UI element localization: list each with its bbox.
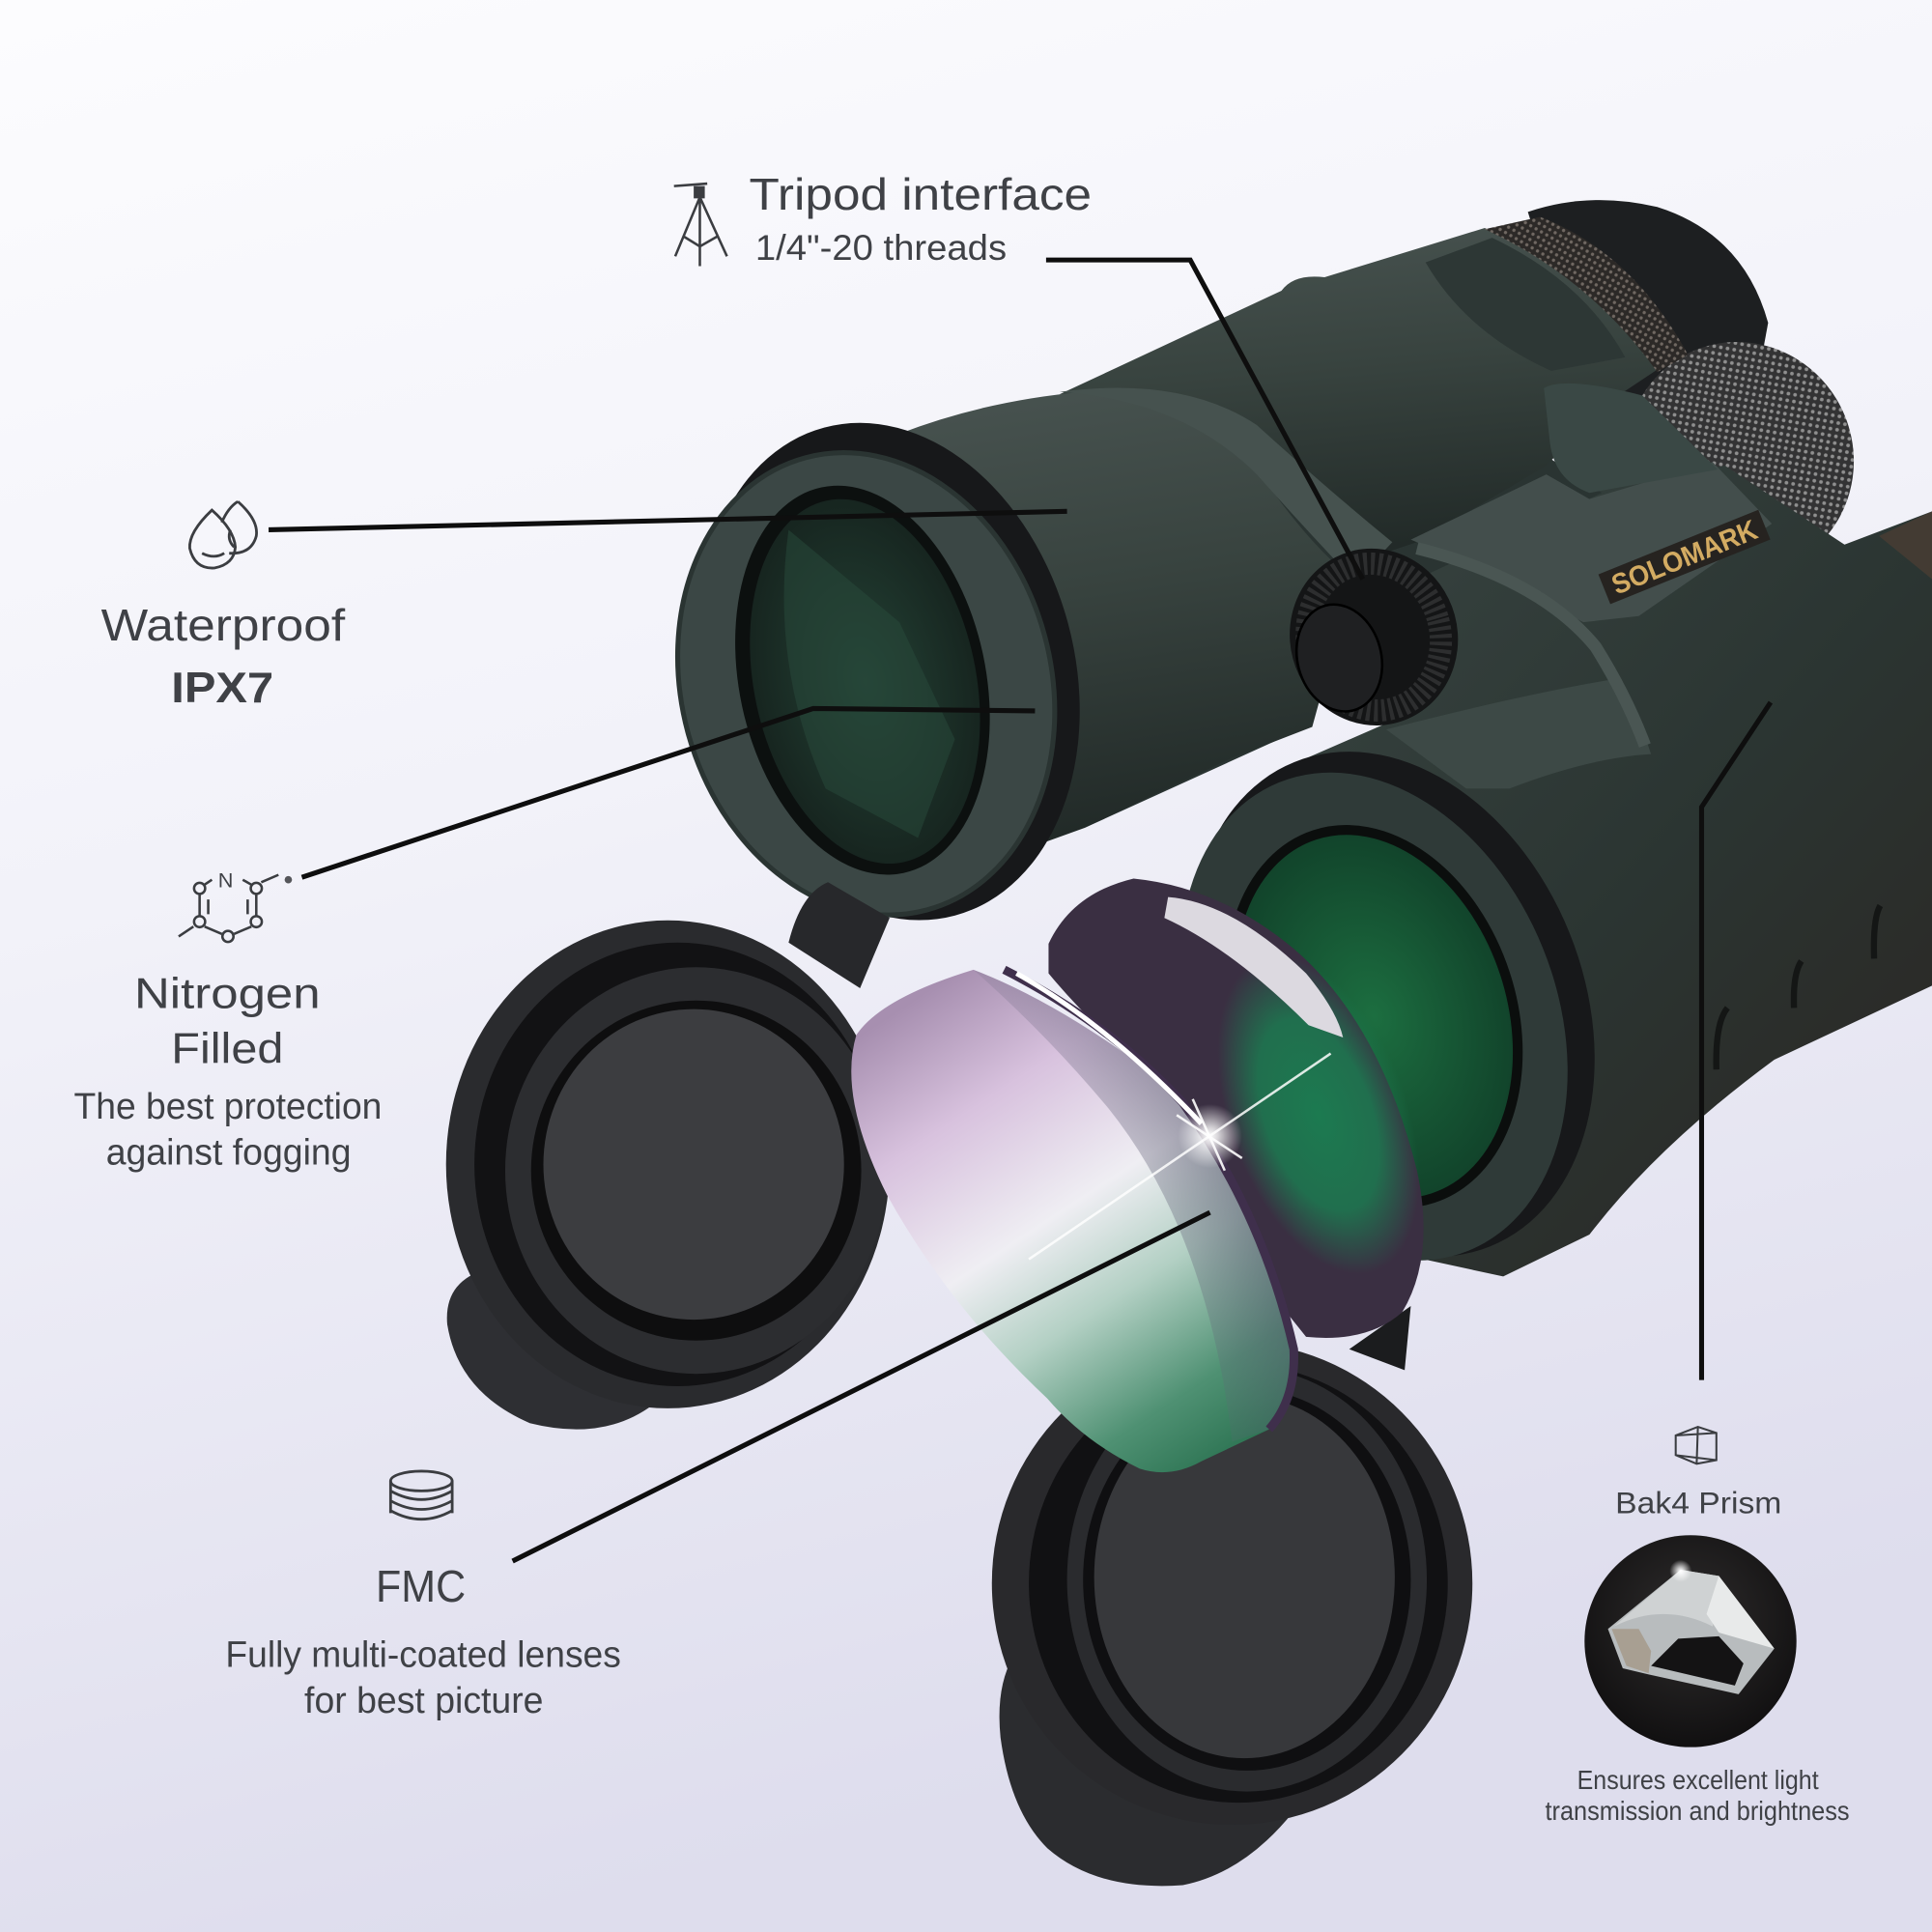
leader: FMC: [513, 1212, 1210, 1561]
icon: water drops: [189, 501, 257, 568]
glass reflection: [784, 529, 955, 838]
eyecup upper: [627, 410, 1105, 958]
focus wheel: [1587, 304, 1892, 612]
prism description: transmission and brightness: [1545, 1796, 1850, 1826]
glass upper: [718, 477, 1011, 885]
FMC description: Fully multi-coated lenses: [225, 1634, 621, 1676]
rear eyepiece: [1528, 200, 1768, 425]
lens white band: [1164, 897, 1343, 1037]
lower barrel: [1213, 466, 1932, 1276]
icon: lens stack: [390, 1471, 452, 1520]
upper barrel rear: [1060, 228, 1658, 567]
purple to green trail: [851, 970, 1292, 1472]
nitrogen description: against fogging: [106, 1131, 352, 1173]
knob: [1270, 529, 1478, 745]
black ring upper: [645, 380, 1133, 963]
nitrogen description: [74, 1086, 382, 1173]
eyecup lower: [1110, 714, 1637, 1319]
FMC description: [225, 1634, 621, 1721]
lens rim: [1005, 970, 1293, 1430]
lens stack: [851, 878, 1459, 1472]
leader: prism: [1701, 702, 1771, 1380]
left lens cap: [446, 882, 890, 1430]
FMC heading: FMC: [376, 1561, 466, 1611]
lower barrel shoulder highlight: [1386, 680, 1651, 788]
barrel underlay: [1060, 394, 1602, 828]
logo plate: SOLOMARK: [1607, 514, 1762, 601]
waterproof heading: Waterproof: [101, 600, 345, 650]
nitrogen description: The best protection: [74, 1086, 382, 1127]
tripod heading: Tripod interface: [750, 169, 1092, 219]
trail shading: [974, 970, 1292, 1441]
glass lower: [1183, 792, 1564, 1240]
wedge: [1544, 384, 1718, 493]
binoculars body: [627, 200, 1932, 1319]
prism image: [1584, 1535, 1797, 1747]
FMC description: for best picture: [304, 1680, 543, 1721]
rear knurled ring: [1485, 216, 1688, 372]
leader: waterproof: [269, 511, 1067, 529]
leader: nitrogen: [301, 708, 1035, 877]
bottom lens cap: [992, 1306, 1472, 1886]
right side brown haze: [1879, 511, 1932, 579]
nitrogen heading: [134, 970, 321, 1073]
rear window patch: [1426, 238, 1625, 371]
black ring lower: [1118, 691, 1667, 1318]
nitrogen heading: Filled: [171, 1026, 283, 1073]
opening upper: [701, 462, 1024, 898]
nitrogen heading: Nitrogen: [134, 970, 321, 1017]
prism description: [1545, 1765, 1850, 1826]
prism heading: Bak4 Prism: [1615, 1485, 1781, 1520]
grip ridges: [1717, 906, 1880, 1069]
hinge strip: [1417, 549, 1645, 746]
upper barrel front: [899, 392, 1353, 850]
bridge top plate: [1410, 462, 1772, 622]
IPX7 label: IPX7: [171, 665, 273, 712]
star flare: [1029, 1054, 1331, 1260]
icon: nitrogen molecule: N: [218, 867, 233, 892]
rim highlight: [1016, 974, 1202, 1123]
leader: tripod: [1046, 260, 1363, 579]
tripod subtext: 1/4"-20 threads: [755, 228, 1007, 268]
icon: nitrogen molecule: [179, 867, 292, 942]
prism description: Ensures excellent light: [1577, 1765, 1819, 1795]
icon: prism cube: [1676, 1427, 1717, 1463]
lens green centre: [1179, 928, 1459, 1302]
back lens: [1048, 878, 1424, 1338]
icon: tripod: [674, 184, 727, 267]
S-curve bridge: [1060, 388, 1392, 582]
